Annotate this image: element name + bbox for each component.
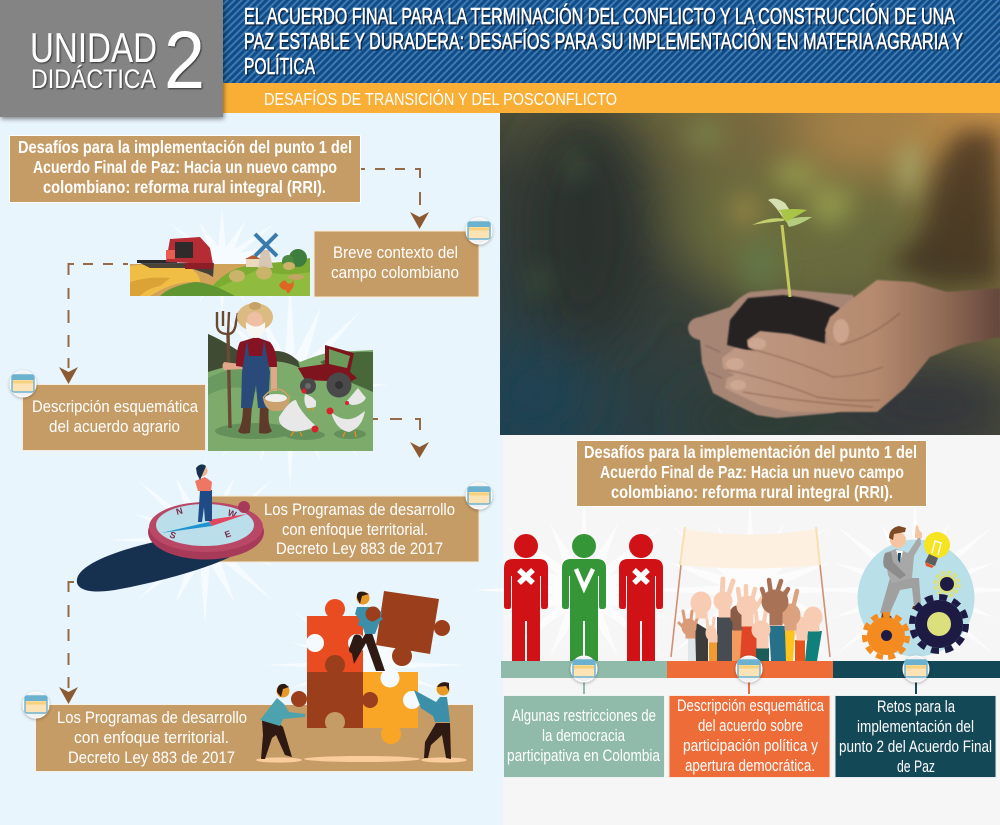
- header: gray unit badge: [0, 0, 223, 117]
- illustration: compass with explorer: W: [226, 507, 238, 520]
- explorer: [198, 490, 212, 522]
- icon: window button: [466, 483, 492, 509]
- lower right panel background: [503, 435, 1000, 825]
- panel: challenges point 2: implementación del: [857, 718, 974, 736]
- sleeves: [688, 637, 696, 661]
- connector arrow: farm to agrarian description: [59, 264, 128, 384]
- icon: voters rejected and accepted: [504, 534, 663, 675]
- panel: programs box 1: con enfoque territorial.: [282, 521, 428, 539]
- panel: title right: Desafíos para la implementación del punto 1 del: [584, 442, 917, 462]
- chickens: [279, 388, 366, 432]
- panel: programs box 2: Decreto Ley 883 de 2017: [68, 749, 235, 767]
- panel: programs box 2: [36, 704, 474, 772]
- photo: seedling in hands: [500, 113, 1000, 435]
- front hand: [722, 280, 1000, 412]
- panel: title right: Acuerdo Final de Paz: Hacia un nuevo campo: [600, 462, 904, 482]
- arms: [222, 362, 243, 370]
- light hands: [691, 579, 822, 648]
- back hand: [687, 288, 854, 419]
- panel: programs box 2: con enfoque territorial.: [74, 729, 229, 747]
- worker top: [352, 633, 385, 671]
- panel: democracy restrictions: Algunas restricciones de: [512, 707, 656, 725]
- overalls: [241, 340, 270, 408]
- shirt: [236, 337, 277, 367]
- dark hand: [762, 580, 788, 625]
- panel: title left: Desafíos para la implementación del punto 1 del: [18, 137, 352, 157]
- header: gray unit badge: DIDÁCTICA: [31, 64, 156, 94]
- panel: context box: campo colombiano: [331, 264, 459, 282]
- illustration: team assembling puzzle: [256, 591, 467, 763]
- illustration: compass with explorer: S: [168, 529, 177, 541]
- connector arrow: compass to second programs box: [59, 582, 78, 704]
- panel: programs box 1: Decreto Ley 883 de 2017: [276, 540, 443, 558]
- heading: main title: [244, 3, 963, 79]
- panel: agrarian description box: [22, 384, 206, 450]
- panel: political participation: apertura democrática.: [685, 757, 815, 775]
- panel: programs box 2: Los Programas de desarrollo: [57, 709, 247, 727]
- panel: democracy restrictions: [504, 696, 664, 778]
- panel: title right: colombiano: reforma rural integral (RRI).: [611, 482, 893, 502]
- illustration: farm with harvester: [130, 234, 310, 296]
- header: gray unit badge: 2: [164, 15, 205, 106]
- illustration: compass with explorer: [77, 464, 264, 592]
- panel: challenges point 2: Retos para la: [877, 698, 956, 716]
- panel: programs box 1: Los Programas de desarrollo: [264, 501, 455, 519]
- basket: [263, 389, 290, 398]
- panel: agrarian description box: del acuerdo agrario: [49, 418, 180, 436]
- connector arrow: title to context: [361, 169, 429, 229]
- icon: window button: [903, 656, 929, 682]
- icon: window button: [23, 692, 49, 718]
- panel: programs box 1: [205, 496, 479, 562]
- panel: challenges point 2: de Paz: [897, 758, 935, 776]
- panel: political participation: participación política y: [683, 737, 819, 755]
- sunburst backgrounds: [110, 207, 465, 740]
- icon: window button: [736, 656, 762, 682]
- illustration: businessman on gears: [858, 525, 974, 658]
- panel: context box: [314, 231, 479, 297]
- tractor: [298, 345, 357, 382]
- header: orange subtitle band: DESAFÍOS DE TRANSICIÓN Y DEL POSCONFLICTO: [264, 88, 617, 109]
- panel: political participation: del acuerdo sobre: [698, 717, 803, 735]
- brown hands behind: [730, 606, 744, 630]
- icon: window button: [466, 218, 492, 244]
- panel: democracy restrictions: participativa en Colombia: [507, 747, 661, 765]
- tan hand: [780, 591, 800, 630]
- panel: context box: Breve contexto del: [333, 244, 458, 262]
- boots: [238, 405, 272, 434]
- panel: title left: [10, 136, 360, 202]
- header: orange subtitle band: [223, 83, 1000, 113]
- heading: main title: POLÍTICA: [244, 53, 315, 79]
- panel: challenges point 2: [835, 696, 996, 778]
- header: gray unit badge: UNIDAD: [30, 24, 157, 71]
- icon: window button: [571, 656, 597, 682]
- illustration: compass with explorer: E: [223, 528, 232, 540]
- seedling: [752, 199, 812, 297]
- right dark figure: [885, 130, 1000, 285]
- soil: [727, 295, 840, 350]
- timeline bar: [501, 661, 1000, 694]
- fork: [217, 311, 238, 428]
- connector arrow: farmer to programs: [373, 419, 429, 458]
- panel: democracy restrictions: la democracia: [542, 727, 626, 745]
- worker left: [261, 720, 292, 759]
- icon: window button: [10, 371, 36, 397]
- worker right: [424, 723, 451, 759]
- illustration: farmer with chickens: [208, 302, 373, 451]
- panel: political participation: [669, 696, 830, 778]
- illustration: raised hands with banner: [671, 527, 830, 661]
- panel: political participation: Descripción esquemática: [677, 697, 825, 715]
- panel: agrarian description box: Descripción esquemática: [32, 398, 199, 416]
- panel: title left: colombiano: reforma rural integral (RRI).: [43, 177, 326, 197]
- illustration: compass with explorer: N: [175, 506, 184, 517]
- panel: title right: [576, 440, 926, 506]
- header: blue title band: [223, 0, 1000, 83]
- panel: title left: Acuerdo Final de Paz: Hacia un nuevo campo: [33, 157, 337, 177]
- hat and head: [237, 303, 273, 331]
